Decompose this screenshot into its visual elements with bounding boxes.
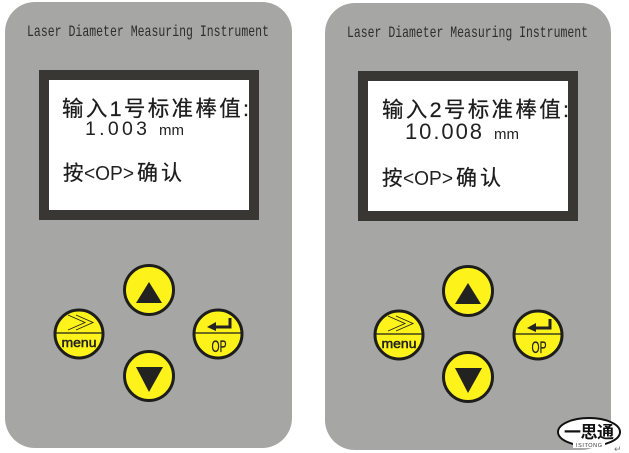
panel: right instrument [325, 3, 611, 450]
instrument title left: Laser Diameter Measuring Instrument [27, 23, 269, 41]
screen confirm left: 确认 [137, 162, 182, 185]
logo: watermark: 一思通 [564, 423, 614, 442]
panel: left instrument [5, 2, 292, 448]
screen value right: mm [494, 126, 519, 143]
screen value left [85, 118, 184, 140]
logo: watermark: ISITONG [576, 443, 602, 449]
button: menu right [375, 311, 423, 359]
button: menu right: menu [382, 336, 416, 351]
button: menu left: menu [62, 335, 96, 350]
button: menu left [55, 310, 103, 358]
screen prompt left: 输入1号标准棒值: [62, 97, 249, 121]
screen confirm right [382, 167, 501, 190]
button: down left [124, 352, 174, 400]
screen confirm right: 确认 [456, 167, 501, 190]
screen confirm right: 按 [382, 167, 402, 190]
screen right [358, 71, 578, 221]
instrument body right [325, 3, 611, 450]
screen value right: 10.008 [405, 119, 482, 144]
logo: watermark [558, 418, 620, 449]
button: OP right [514, 311, 562, 359]
button: OP left [194, 310, 242, 358]
button: OP right: OP [532, 338, 546, 357]
button: up left [124, 266, 174, 314]
screen confirm left: 按 [63, 162, 84, 185]
instrument body left [5, 2, 292, 448]
button: OP left: OP [212, 337, 226, 356]
screen value right [405, 119, 519, 144]
screen prompt right: 输入2号标准棒值: [382, 98, 569, 122]
screen confirm left: <OP> [84, 163, 134, 185]
screen value left: 1.003 [85, 118, 147, 140]
screen value left: mm [159, 122, 184, 139]
screen confirm right: <OP> [403, 168, 453, 190]
screen confirm left [63, 162, 182, 185]
button: down right [444, 352, 492, 402]
button: up right [444, 266, 492, 316]
screen left [39, 70, 259, 220]
